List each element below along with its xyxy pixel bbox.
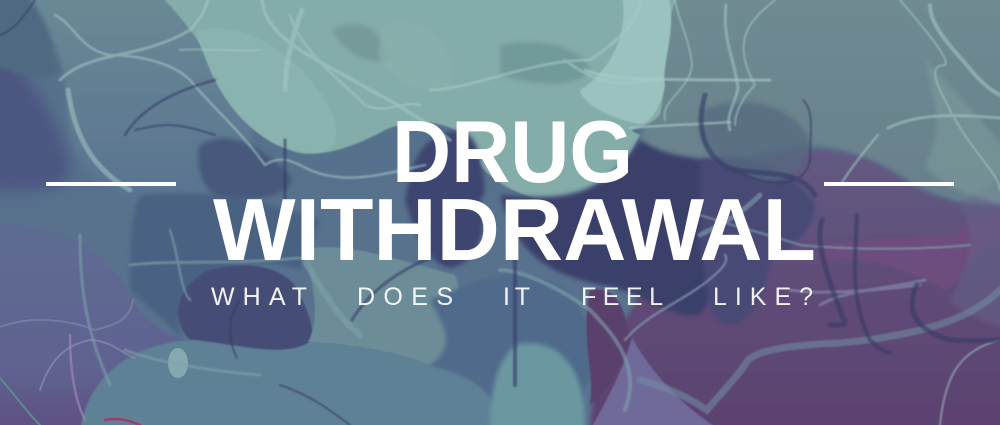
smoke: pale lobe right (580, 0, 671, 124)
smoke: bottom lilac wedge (590, 338, 720, 425)
smoke: lower lilac and crimson strands (0, 300, 140, 425)
title line 1: DRUG (392, 102, 633, 201)
smoke: lower centre teal body (80, 340, 505, 425)
smoke: right of centre dark navy (500, 140, 746, 316)
right rule (824, 182, 954, 186)
smoke: left dark navy under D (405, 131, 485, 268)
smoke: right slate veil (950, 175, 1000, 330)
subtitle: LIKE? (713, 283, 813, 311)
smoke: lower centre-left muted slate (130, 193, 320, 345)
smoke: upper left muted teal (25, 0, 252, 206)
subtitle (211, 283, 813, 311)
smoke: upper-right dim lobe (699, 102, 810, 181)
smoke: mid teal body (303, 247, 463, 365)
smoke: darker inner lobes (332, 24, 388, 61)
smoke: magenta streak (825, 212, 1000, 290)
subtitle: DOES (357, 283, 453, 311)
title (213, 102, 816, 279)
smoke: dark lobe centre left (178, 265, 312, 351)
subtitle: WHAT (211, 283, 307, 311)
smoke: lower right purple field (590, 149, 1000, 425)
smoke: light lobe (195, 28, 336, 152)
subtitle: IT (503, 283, 530, 311)
smoke: blue-grey strands (80, 70, 1000, 410)
title line 2: WITHDRAWAL (213, 180, 816, 279)
left rule (46, 182, 176, 186)
subtitle: FEEL (581, 283, 663, 311)
smoke: lower teal blob (490, 343, 585, 425)
smoke: top right grey-teal field (640, 0, 1000, 215)
smoke: lower centre slate column (430, 274, 594, 425)
smoke: left blue-violet field (0, 30, 70, 191)
smoke: top left blue (0, 0, 60, 77)
smoke: pale blob (168, 348, 188, 378)
smoke: navy fade toward right (700, 156, 815, 325)
smoke: lower left violet field (0, 224, 190, 425)
smoke: mid dark blue above title (198, 138, 291, 199)
smoke: right teal veil (925, 60, 1000, 205)
smoke: upper teal cloud (155, 0, 680, 205)
smoke: plum band (586, 289, 630, 405)
